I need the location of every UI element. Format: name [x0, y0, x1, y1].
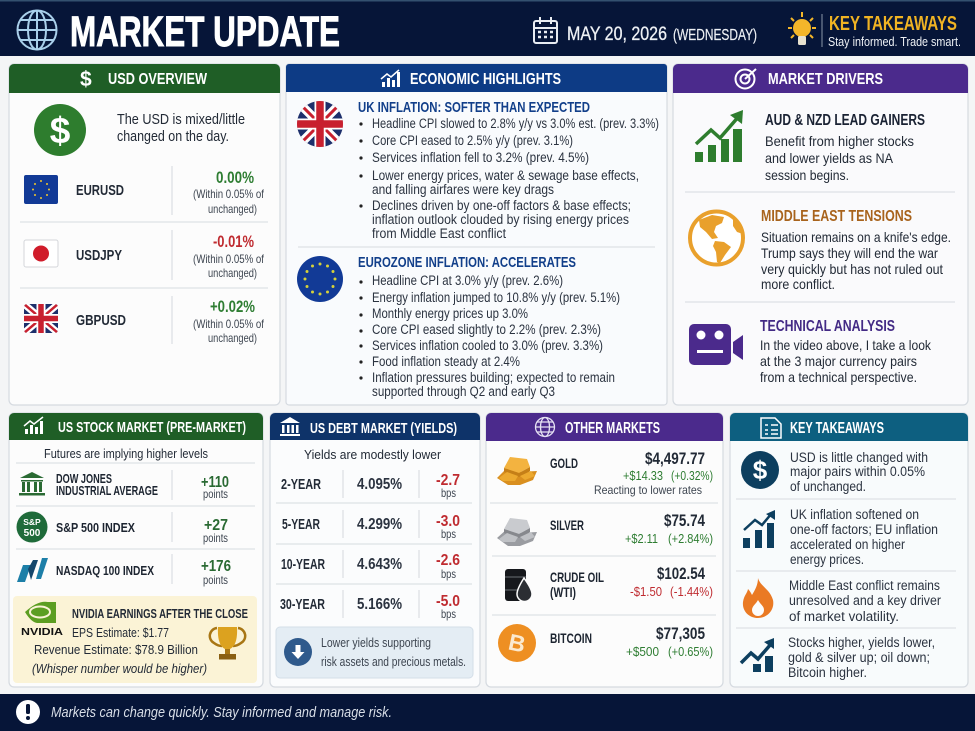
Eurozone inflation text: Core CPI eased slightly to 2.2% (prev. 2.3%)	[372, 322, 601, 337]
icon: dollar coin: $	[50, 110, 71, 151]
Eurozone inflation text: Energy inflation jumped to 10.8% y/y (prev. 5.1%)	[372, 290, 620, 305]
key takeaways tagline	[828, 13, 961, 49]
Eurozone inflation text: EUROZONE INFLATION: ACCELERATES	[358, 254, 576, 271]
icon: EU flag circle	[297, 256, 343, 302]
footer message: Markets can change quickly. Stay informed and manage risk.	[51, 704, 392, 721]
UK inflation text: Lower energy prices, water & sewage base effects,	[372, 168, 639, 183]
row: EURUSD: EURUSD	[76, 182, 124, 199]
row: USDJPY: USDJPY	[76, 247, 122, 264]
panel: economic highlights	[286, 64, 667, 405]
row: USDJPY: -0.01%	[213, 233, 254, 251]
takeaway: markets summary	[741, 635, 935, 680]
row: USDJPY	[24, 230, 265, 280]
row: Nasdaq 100: +176	[201, 558, 231, 575]
takeaway: USD: major pairs within 0.05%	[790, 464, 925, 479]
heading: US stock market	[24, 417, 246, 436]
callout: Nvidia earnings	[13, 596, 257, 683]
driver: AUD and NZD	[765, 112, 925, 183]
driver: AUD and NZD: and lower yields as NA	[765, 150, 894, 166]
row: S&P 500: points	[203, 531, 228, 545]
UK inflation text: UK INFLATION: SOFTER THAN EXPECTED	[358, 99, 590, 116]
Eurozone inflation text: Headline CPI at 3.0% y/y (prev. 2.6%)	[372, 273, 563, 288]
Eurozone inflation text	[358, 254, 620, 399]
row: crude oil: (-1.44%)	[670, 584, 713, 599]
row: Dow Jones: DOW JONES	[56, 471, 112, 486]
row: GBPUSD: GBPUSD	[76, 312, 126, 329]
callout: lower yields: risk assets and precious metals.	[321, 655, 466, 669]
panel: key takeaways	[730, 413, 968, 687]
Eurozone inflation text: Inflation pressures building; expected to remain	[372, 370, 615, 385]
heading: key takeaways: KEY TAKEAWAYS	[790, 420, 884, 437]
panel: USD overview	[9, 64, 280, 405]
row: bitcoin: B	[506, 629, 528, 657]
row: 10-year yield: -2.6	[436, 552, 460, 569]
takeaway: inflation: accelerated on higher	[790, 537, 905, 552]
row: gold: Reacting to lower rates	[594, 483, 702, 497]
row: S&P 500: +27	[204, 517, 228, 534]
row: 5-year yield	[282, 513, 460, 541]
Eurozone inflation text: Monthly energy prices up 3.0%	[372, 306, 528, 321]
stock subtitle: Futures are implying higher levels	[44, 447, 208, 461]
row: 2-year yield: 2-YEAR	[281, 476, 321, 493]
row: bitcoin: BITCOIN	[550, 630, 592, 646]
callout: lower yields: Lower yields supporting	[321, 636, 431, 650]
panel: other markets	[486, 413, 723, 687]
callout: Nvidia earnings: EPS Estimate: $1.77	[72, 625, 169, 640]
UK inflation text: and falling airfares were key drags	[372, 182, 554, 197]
row: bitcoin: $77,305	[656, 624, 705, 643]
heading: USD overview: USD OVERVIEW	[108, 71, 208, 88]
UK inflation text: inflation outlook clouded by rising energy prices	[372, 212, 629, 227]
row: 5-year yield: -3.0	[436, 513, 460, 530]
header band	[0, 0, 975, 56]
row: Dow Jones: +110	[201, 474, 229, 491]
row: GBPUSD: unchanged)	[208, 331, 257, 345]
row: S&P 500	[16, 512, 228, 545]
row: 5-year yield: 5-YEAR	[282, 516, 320, 533]
heading: US stock market: US STOCK MARKET (PRE-MARKET)	[58, 419, 246, 436]
USD summary	[117, 112, 245, 145]
debt subtitle: Yields are modestly lower	[304, 447, 442, 462]
row: EURUSD: unchanged)	[208, 202, 257, 216]
takeaway: USD: $	[753, 455, 768, 485]
Eurozone inflation text: Food inflation steady at 2.4%	[372, 354, 520, 369]
heading: US debt market	[280, 417, 457, 437]
row: EURUSD: 0.00%	[216, 169, 254, 187]
row: gold	[497, 449, 713, 497]
UK inflation text: Headline CPI slowed to 2.8% y/y vs 3.0% est. (prev. 3.3%)	[372, 116, 659, 131]
UK inflation text: Declines driven by one-off factors & base effects;	[372, 198, 631, 213]
driver: technical analysis: at the 3 major currency pairs	[760, 353, 917, 369]
row: 10-year yield: 4.643%	[357, 556, 402, 573]
row: crude oil: -$1.50	[630, 584, 662, 599]
UK inflation text: from Middle East conflict	[372, 226, 506, 241]
row: USDJPY: unchanged)	[208, 266, 257, 280]
row: bitcoin: (+0.65%)	[668, 644, 713, 659]
driver: Middle East tensions	[761, 208, 951, 292]
icon: orange globe	[690, 212, 743, 264]
takeaway: Middle East fire: unresolved and a key driver	[789, 593, 941, 608]
row: GBPUSD: +0.02%	[210, 298, 255, 316]
driver: technical analysis: In the video above, I take a look	[760, 337, 932, 353]
row: Dow Jones	[19, 470, 229, 501]
driver: Middle East tensions: Trump says they will end the war	[761, 245, 938, 261]
panel: market drivers	[673, 64, 968, 405]
driver: AUD and NZD: session begins.	[765, 167, 849, 183]
row: gold: (+0.32%)	[671, 468, 713, 483]
row: Nasdaq 100	[17, 554, 231, 587]
callout: Nvidia earnings: (Whisper number would be higher)	[32, 661, 207, 676]
row: 2-year yield: bps	[441, 486, 456, 500]
heading: other markets	[536, 418, 660, 437]
row: Dow Jones: points	[203, 487, 228, 501]
heading: economic highlights: ECONOMIC HIGHLIGHTS	[410, 71, 561, 88]
row: GBPUSD	[24, 296, 265, 345]
driver: Middle East tensions: more conflict.	[761, 276, 835, 292]
row: 10-year yield: 10-YEAR	[281, 556, 325, 573]
row: 30-year yield: -5.0	[436, 593, 460, 610]
row: silver	[497, 511, 713, 546]
driver: technical analysis: TECHNICAL ANALYSIS	[760, 318, 895, 335]
heading: other markets: OTHER MARKETS	[565, 420, 660, 437]
heading: key takeaways	[761, 418, 884, 438]
takeaway: inflation: UK inflation softened on	[790, 507, 919, 522]
Eurozone inflation text: supported through Q2 and early Q3	[372, 384, 555, 399]
row: S&P 500: 500	[24, 528, 41, 539]
row: crude oil: $102.54	[657, 564, 705, 583]
row: gold: +$14.33	[623, 468, 663, 483]
driver: AUD and NZD: AUD & NZD LEAD GAINERS	[765, 112, 925, 129]
row: GBPUSD: (Within 0.05% of	[193, 317, 265, 331]
driver: Middle East tensions: very quickly but has not ruled out	[761, 261, 943, 277]
row: gold: $4,497.77	[645, 449, 705, 468]
icon: calendar	[534, 17, 557, 43]
row: silver: SILVER	[550, 517, 584, 533]
callout: Nvidia earnings: NVIDIA EARNINGS AFTER THE CLOSE	[72, 606, 248, 621]
heading: market drivers	[736, 69, 883, 88]
panel: US stock market	[9, 413, 263, 687]
row: 30-year yield: bps	[441, 607, 456, 621]
row: 5-year yield: bps	[441, 527, 456, 541]
row: 5-year yield: 4.299%	[357, 516, 402, 533]
heading: US debt market: US DEBT MARKET (YIELDS)	[310, 420, 457, 437]
row: 10-year yield	[281, 552, 460, 581]
driver: technical analysis	[760, 318, 932, 385]
takeaway: USD: USD is little changed with	[790, 450, 928, 465]
UK inflation text	[358, 99, 659, 241]
icon: light bulb	[788, 12, 822, 47]
row: EURUSD: (Within 0.05% of	[193, 187, 265, 201]
row: silver: $75.74	[664, 511, 705, 530]
row: EURUSD	[24, 166, 265, 216]
takeaway: Middle East fire: Middle East conflict remains	[789, 578, 940, 593]
row: gold: GOLD	[550, 455, 578, 471]
takeaway: inflation	[743, 507, 938, 567]
icon: exclamation	[16, 700, 40, 724]
footer band	[0, 694, 975, 731]
icon: dollar coin	[34, 104, 86, 156]
icon: video camera	[689, 324, 743, 365]
takeaway: USD: of unchanged.	[790, 479, 866, 494]
driver: AUD and NZD: Benefit from higher stocks	[765, 133, 914, 149]
USD summary: changed on the day.	[117, 129, 229, 145]
row: USDJPY: (Within 0.05% of	[193, 252, 265, 266]
takeaway: USD	[741, 450, 928, 494]
row: bitcoin: +$500	[626, 644, 659, 659]
icon: trophy	[210, 627, 245, 660]
UK inflation text: Core CPI eased to 2.5% y/y (prev. 3.1%)	[372, 133, 573, 148]
icon: rising chart	[695, 110, 743, 162]
takeaway: markets summary: Stocks higher, yields lower,	[788, 635, 935, 650]
date: (WEDNESDAY)	[673, 27, 757, 44]
takeaway: inflation: energy prices.	[790, 552, 864, 567]
takeaway: Middle East fire: of market volatility.	[789, 609, 899, 624]
row: Nasdaq 100: points	[203, 573, 228, 587]
row: crude oil	[505, 564, 713, 602]
heading: economic highlights	[381, 70, 561, 88]
row: S&P 500: S&P	[23, 517, 41, 527]
row: 2-year yield: 4.095%	[357, 476, 402, 493]
icon: globe	[18, 10, 56, 50]
callout: Nvidia earnings: Revenue Estimate: $78.9 Billion	[34, 642, 198, 657]
row: 10-year yield: bps	[441, 567, 456, 581]
row: bitcoin	[498, 624, 713, 662]
heading: USD overview: $	[80, 68, 92, 91]
Eurozone inflation text: Services inflation cooled to 3.0% (prev. 3.3%)	[372, 338, 603, 353]
row: 30-year yield: 5.166%	[357, 596, 402, 613]
row: Nasdaq 100: NASDAQ 100 INDEX	[56, 563, 154, 578]
row: 30-year yield	[280, 593, 460, 621]
takeaway: Middle East fire	[743, 578, 941, 624]
icon: Nvidia logo: NVIDIA	[21, 626, 63, 638]
panel: US debt market	[270, 413, 480, 687]
row: crude oil: (WTI)	[550, 584, 576, 600]
row: 2-year yield	[281, 472, 460, 500]
row: crude oil: CRUDE OIL	[550, 569, 604, 585]
row: silver: (+2.84%)	[668, 531, 713, 546]
takeaway: markets summary: gold & silver up; oil down;	[788, 650, 930, 665]
heading: USD overview	[80, 68, 208, 91]
row: S&P 500: S&P 500 INDEX	[56, 520, 135, 535]
date: MAY 20, 2026	[567, 24, 667, 45]
driver: technical analysis: from a technical perspective.	[760, 369, 917, 385]
title: MARKET UPDATE	[70, 8, 340, 56]
heading: market drivers: MARKET DRIVERS	[768, 71, 883, 88]
icon: UK flag circle	[296, 100, 344, 148]
USD summary: The USD is mixed/little	[117, 112, 245, 128]
row: 30-year yield: 30-YEAR	[280, 596, 325, 613]
date	[567, 24, 757, 45]
icon: Nvidia logo	[21, 602, 63, 638]
callout: lower yields	[276, 627, 473, 678]
UK inflation text: Services inflation fell to 3.2% (prev. 4.5%)	[372, 150, 589, 165]
takeaway: inflation: one-off factors; EU inflation	[790, 522, 938, 537]
row: silver: +$2.11	[625, 531, 658, 546]
driver: Middle East tensions: MIDDLE EAST TENSIONS	[761, 208, 912, 225]
takeaway: markets summary: Bitcoin higher.	[788, 665, 867, 680]
row: 2-year yield: -2.7	[436, 472, 460, 489]
row: Dow Jones: INDUSTRIAL AVERAGE	[56, 483, 158, 498]
